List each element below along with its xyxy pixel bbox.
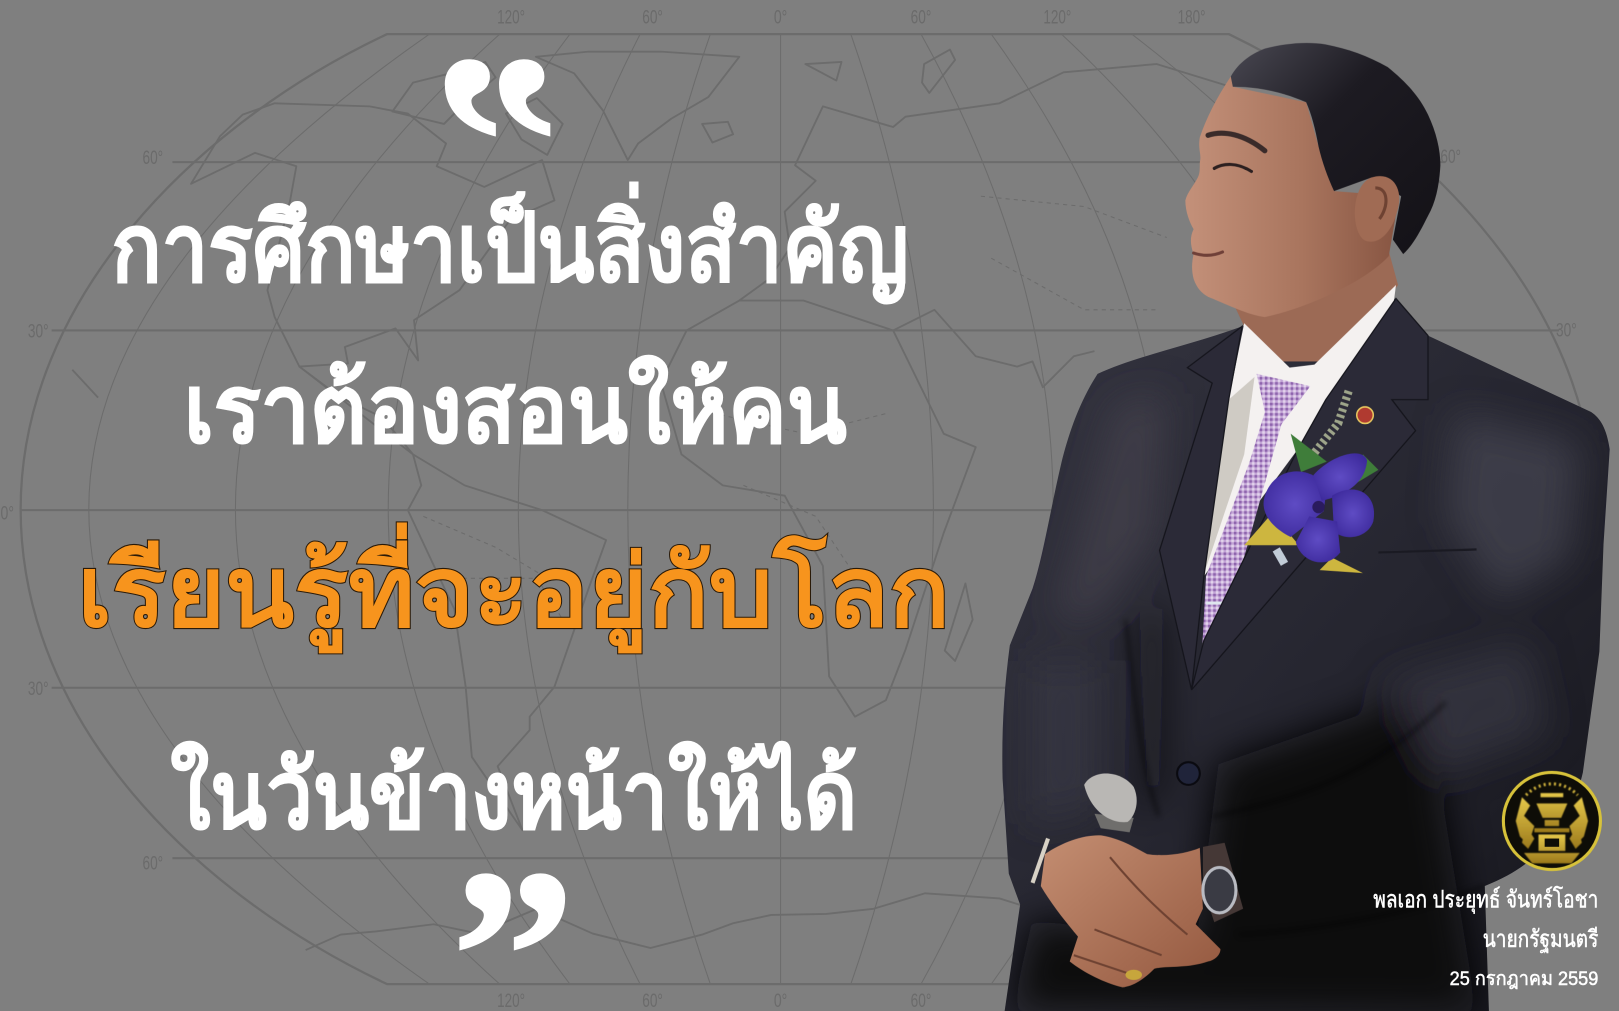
Eurasia bbox=[739, 64, 1234, 387]
mic grille bbox=[1084, 773, 1137, 822]
watch strap bbox=[1203, 843, 1243, 922]
quote line 4: ในวันข้างหน้าให้ได้ bbox=[170, 741, 857, 849]
right guardian bbox=[1569, 797, 1588, 849]
Greenland bbox=[536, 52, 739, 160]
pedestal bbox=[1524, 834, 1580, 863]
Antarctica bbox=[306, 893, 1033, 950]
urn bbox=[1534, 793, 1569, 832]
map degree labels: 60° bbox=[911, 7, 931, 29]
pocket seam bbox=[1378, 549, 1477, 552]
Madagascar bbox=[945, 583, 973, 661]
corsage bbox=[1244, 388, 1378, 573]
attribution bbox=[1373, 886, 1599, 990]
map degree labels: 0° bbox=[1, 502, 14, 524]
orchid petals bbox=[1264, 471, 1327, 537]
head bbox=[1185, 43, 1440, 317]
meridians bbox=[89, 34, 1441, 984]
finger shadows bbox=[1074, 857, 1187, 976]
watch face bbox=[1203, 867, 1236, 913]
leaves bbox=[1291, 434, 1378, 485]
map degree labels: 30° bbox=[28, 678, 49, 700]
jacket button bbox=[1177, 762, 1200, 785]
map degree labels: 0° bbox=[774, 7, 787, 29]
ear bbox=[1355, 176, 1399, 242]
map degree labels: 60° bbox=[642, 7, 663, 29]
map degree labels: 60° bbox=[142, 147, 163, 169]
quote line 1: การศึกษาเป็นสิ่งสำคัญ bbox=[112, 181, 909, 305]
orchid center bbox=[1312, 501, 1325, 513]
suit jacket bbox=[1002, 298, 1610, 1011]
government seal bbox=[1503, 772, 1600, 870]
hair bbox=[1231, 43, 1440, 254]
closing quotation mark: „ bbox=[453, 690, 577, 965]
map degree labels: 30° bbox=[1556, 320, 1577, 342]
necktie bbox=[1202, 374, 1310, 655]
continents bbox=[72, 50, 1234, 950]
map degree labels: 60° bbox=[1440, 146, 1461, 168]
stem wrap bbox=[1276, 549, 1284, 564]
jacket lapels bbox=[1160, 298, 1428, 690]
left guardian bbox=[1516, 797, 1534, 849]
forearm sleeve edge bbox=[1124, 620, 1446, 814]
map degree labels: 30° bbox=[28, 321, 49, 343]
shirt collar bbox=[1204, 285, 1396, 576]
opening quotation mark: ” bbox=[435, 4, 559, 279]
tie clip bbox=[1206, 602, 1233, 605]
microphone bbox=[1084, 773, 1137, 832]
pedestal inner bbox=[1545, 839, 1559, 847]
wristwatch bbox=[1203, 843, 1243, 922]
seal disc bbox=[1503, 772, 1600, 870]
eye bbox=[1214, 164, 1251, 171]
suit shading bbox=[1012, 392, 1580, 1011]
dashed borders bbox=[423, 196, 1167, 620]
quote line 2: เราต้องสอนให้คน bbox=[184, 355, 847, 463]
lapel pin bbox=[1357, 407, 1373, 423]
map degree labels: 60° bbox=[142, 853, 163, 875]
rays bbox=[1526, 784, 1578, 795]
quote line 3 highlighted: เรียนรู้ที่จะอยู่กับโลก bbox=[77, 522, 950, 654]
face bbox=[1185, 76, 1399, 317]
Central and South America bbox=[299, 367, 606, 830]
map degree labels: 180° bbox=[1178, 7, 1205, 29]
eyebrow bbox=[1208, 133, 1265, 151]
map degree labels: 120° bbox=[1043, 7, 1071, 29]
shirt shadow bbox=[1206, 377, 1255, 568]
North America bbox=[191, 103, 554, 367]
sprig bbox=[1303, 388, 1350, 467]
Arctic islands bbox=[392, 62, 563, 155]
mic collar bbox=[1094, 814, 1134, 832]
Africa bbox=[661, 301, 976, 717]
ring bbox=[1125, 970, 1142, 980]
ribbon bbox=[1244, 513, 1363, 573]
map degree labels: 120° bbox=[497, 7, 525, 29]
neck bbox=[1234, 232, 1398, 361]
Iceland and small islands bbox=[72, 50, 955, 398]
seal emblem bbox=[1516, 784, 1588, 863]
mouth bbox=[1194, 252, 1223, 255]
date: 25 กรกฎาคม 2559 bbox=[1450, 968, 1598, 990]
cuff bbox=[1033, 839, 1048, 883]
parallels bbox=[21, 162, 1594, 858]
ear inner shadow bbox=[1375, 188, 1386, 219]
hands bbox=[1041, 835, 1220, 987]
portrait of the prime minister bbox=[1002, 43, 1610, 1011]
